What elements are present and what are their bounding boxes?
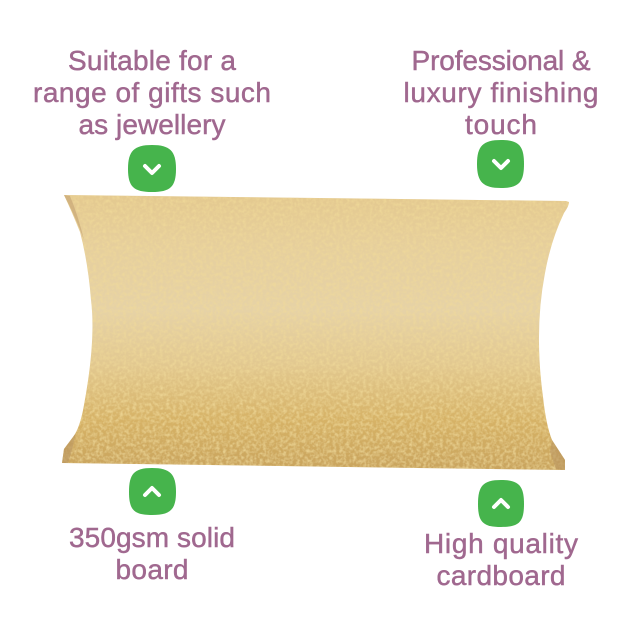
label: 350gsm board: board bbox=[116, 554, 188, 585]
icon: up chevron right bbox=[478, 480, 524, 527]
icon: down chevron right bbox=[477, 140, 524, 188]
icon: up chevron left bbox=[129, 468, 176, 515]
label: suitable for gifts bbox=[33, 45, 271, 140]
label: professional finishing bbox=[404, 45, 598, 140]
label: professional finishing: touch bbox=[465, 109, 537, 140]
label: professional finishing: luxury finishing bbox=[404, 77, 598, 108]
label: high quality cardboard: cardboard bbox=[436, 560, 566, 591]
fold: top left bbox=[64, 195, 84, 240]
label: high quality cardboard: High quality bbox=[424, 528, 578, 559]
label: suitable for gifts: as jewellery bbox=[78, 109, 226, 140]
fold: bottom left bbox=[62, 433, 76, 463]
label: high quality cardboard bbox=[424, 528, 578, 591]
label: 350gsm board bbox=[69, 522, 235, 585]
fold: bottom right bbox=[550, 440, 565, 470]
label: 350gsm board: 350gsm solid bbox=[69, 522, 235, 553]
label: professional finishing: Professional & bbox=[412, 45, 591, 76]
icon: down chevron left bbox=[128, 145, 176, 192]
product: pillow box bbox=[62, 195, 569, 470]
label: suitable for gifts: range of gifts such bbox=[33, 77, 271, 108]
label: suitable for gifts: Suitable for a bbox=[68, 45, 236, 76]
